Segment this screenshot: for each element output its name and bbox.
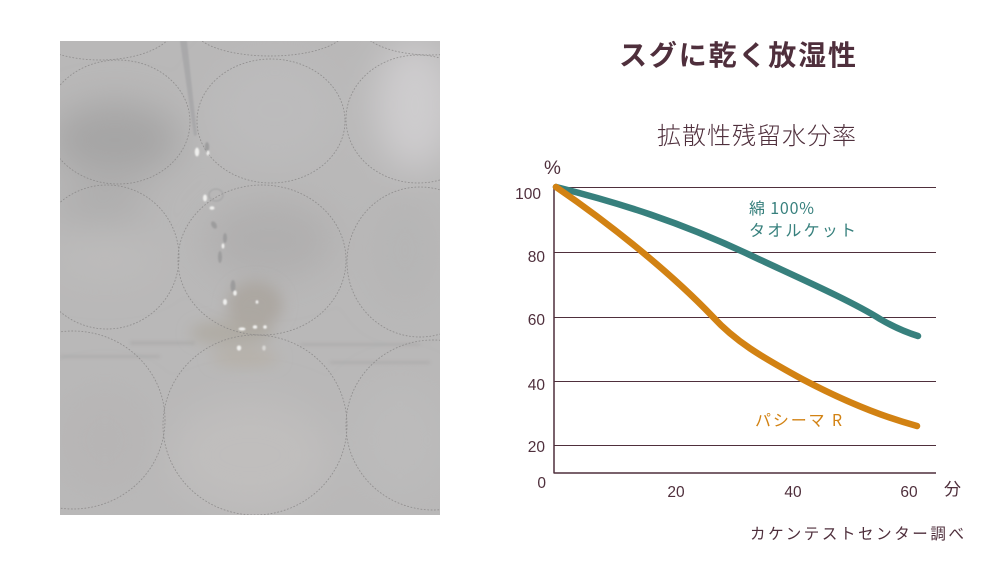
y axis labels: 80 — [528, 249, 545, 266]
y axis labels — [515, 186, 546, 492]
y axis labels: 100 — [515, 186, 541, 203]
x axis labels: 60 — [900, 484, 918, 501]
x axis labels — [667, 484, 918, 501]
label: cotton 100% towelling: タオルケット — [749, 217, 856, 241]
title: スグに乾く放湿性 — [619, 34, 856, 74]
chart grid and axes — [554, 187, 936, 474]
y axis labels: 40 — [528, 377, 545, 394]
label: cotton 100% towelling: 綿 100% — [749, 195, 814, 219]
y axis labels: 0 — [537, 475, 546, 492]
fabric fold bands — [133, 342, 134, 344]
teal curve: cotton towelling — [556, 187, 918, 336]
label: cotton 100% towelling — [749, 195, 856, 241]
source note: カケンテストセンター調べ — [750, 522, 964, 544]
line chart — [515, 158, 961, 501]
y axis labels: 20 — [528, 439, 545, 456]
chart subtitle: 拡散性残留水分率 — [657, 116, 856, 151]
x axis unit: 分 — [944, 475, 961, 500]
orange curve: Pasima R — [556, 187, 917, 426]
y axis unit: % — [544, 158, 561, 179]
y axis labels: 60 — [528, 312, 545, 329]
photo: water on quilted fabric — [60, 41, 440, 515]
x axis labels: 40 — [784, 484, 802, 501]
water stream — [180, 41, 267, 351]
water stain — [190, 281, 283, 367]
label: Pasima R: パシーマ R — [755, 407, 842, 431]
x axis labels: 20 — [667, 484, 685, 501]
quilting stitches — [60, 41, 440, 515]
